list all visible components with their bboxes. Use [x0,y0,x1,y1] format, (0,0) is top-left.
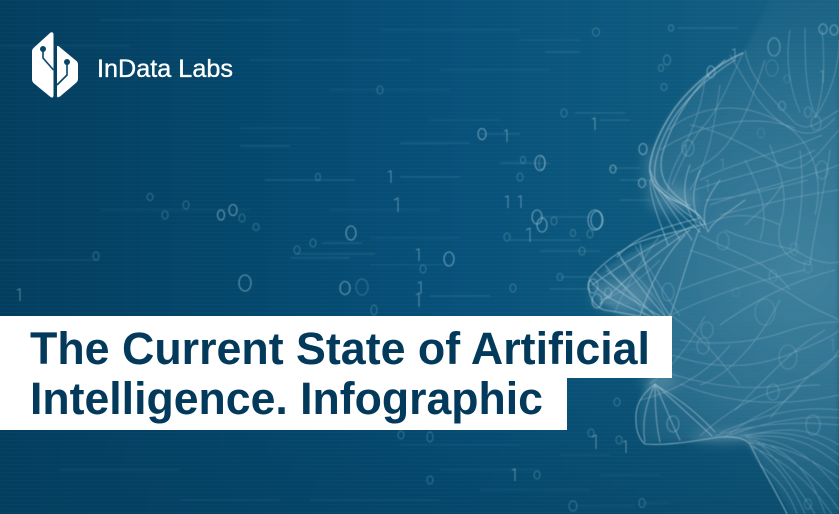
illustration: wireframe face [589,0,839,514]
face: nose and jaw highlights [592,146,759,443]
face: soft inner glow [590,0,839,514]
face: silhouette contour [589,53,787,514]
face: mesh lines [600,28,839,514]
logo wordmark: InData Labs [97,55,233,83]
title text [30,323,650,424]
icon: brain circuit hexagon [32,32,78,98]
logo: InData Labs [32,32,233,98]
title text: Intelligence. Infographic [30,373,543,424]
title text: The Current State of Artificial [30,323,650,374]
title band: white stepped background [0,316,672,430]
